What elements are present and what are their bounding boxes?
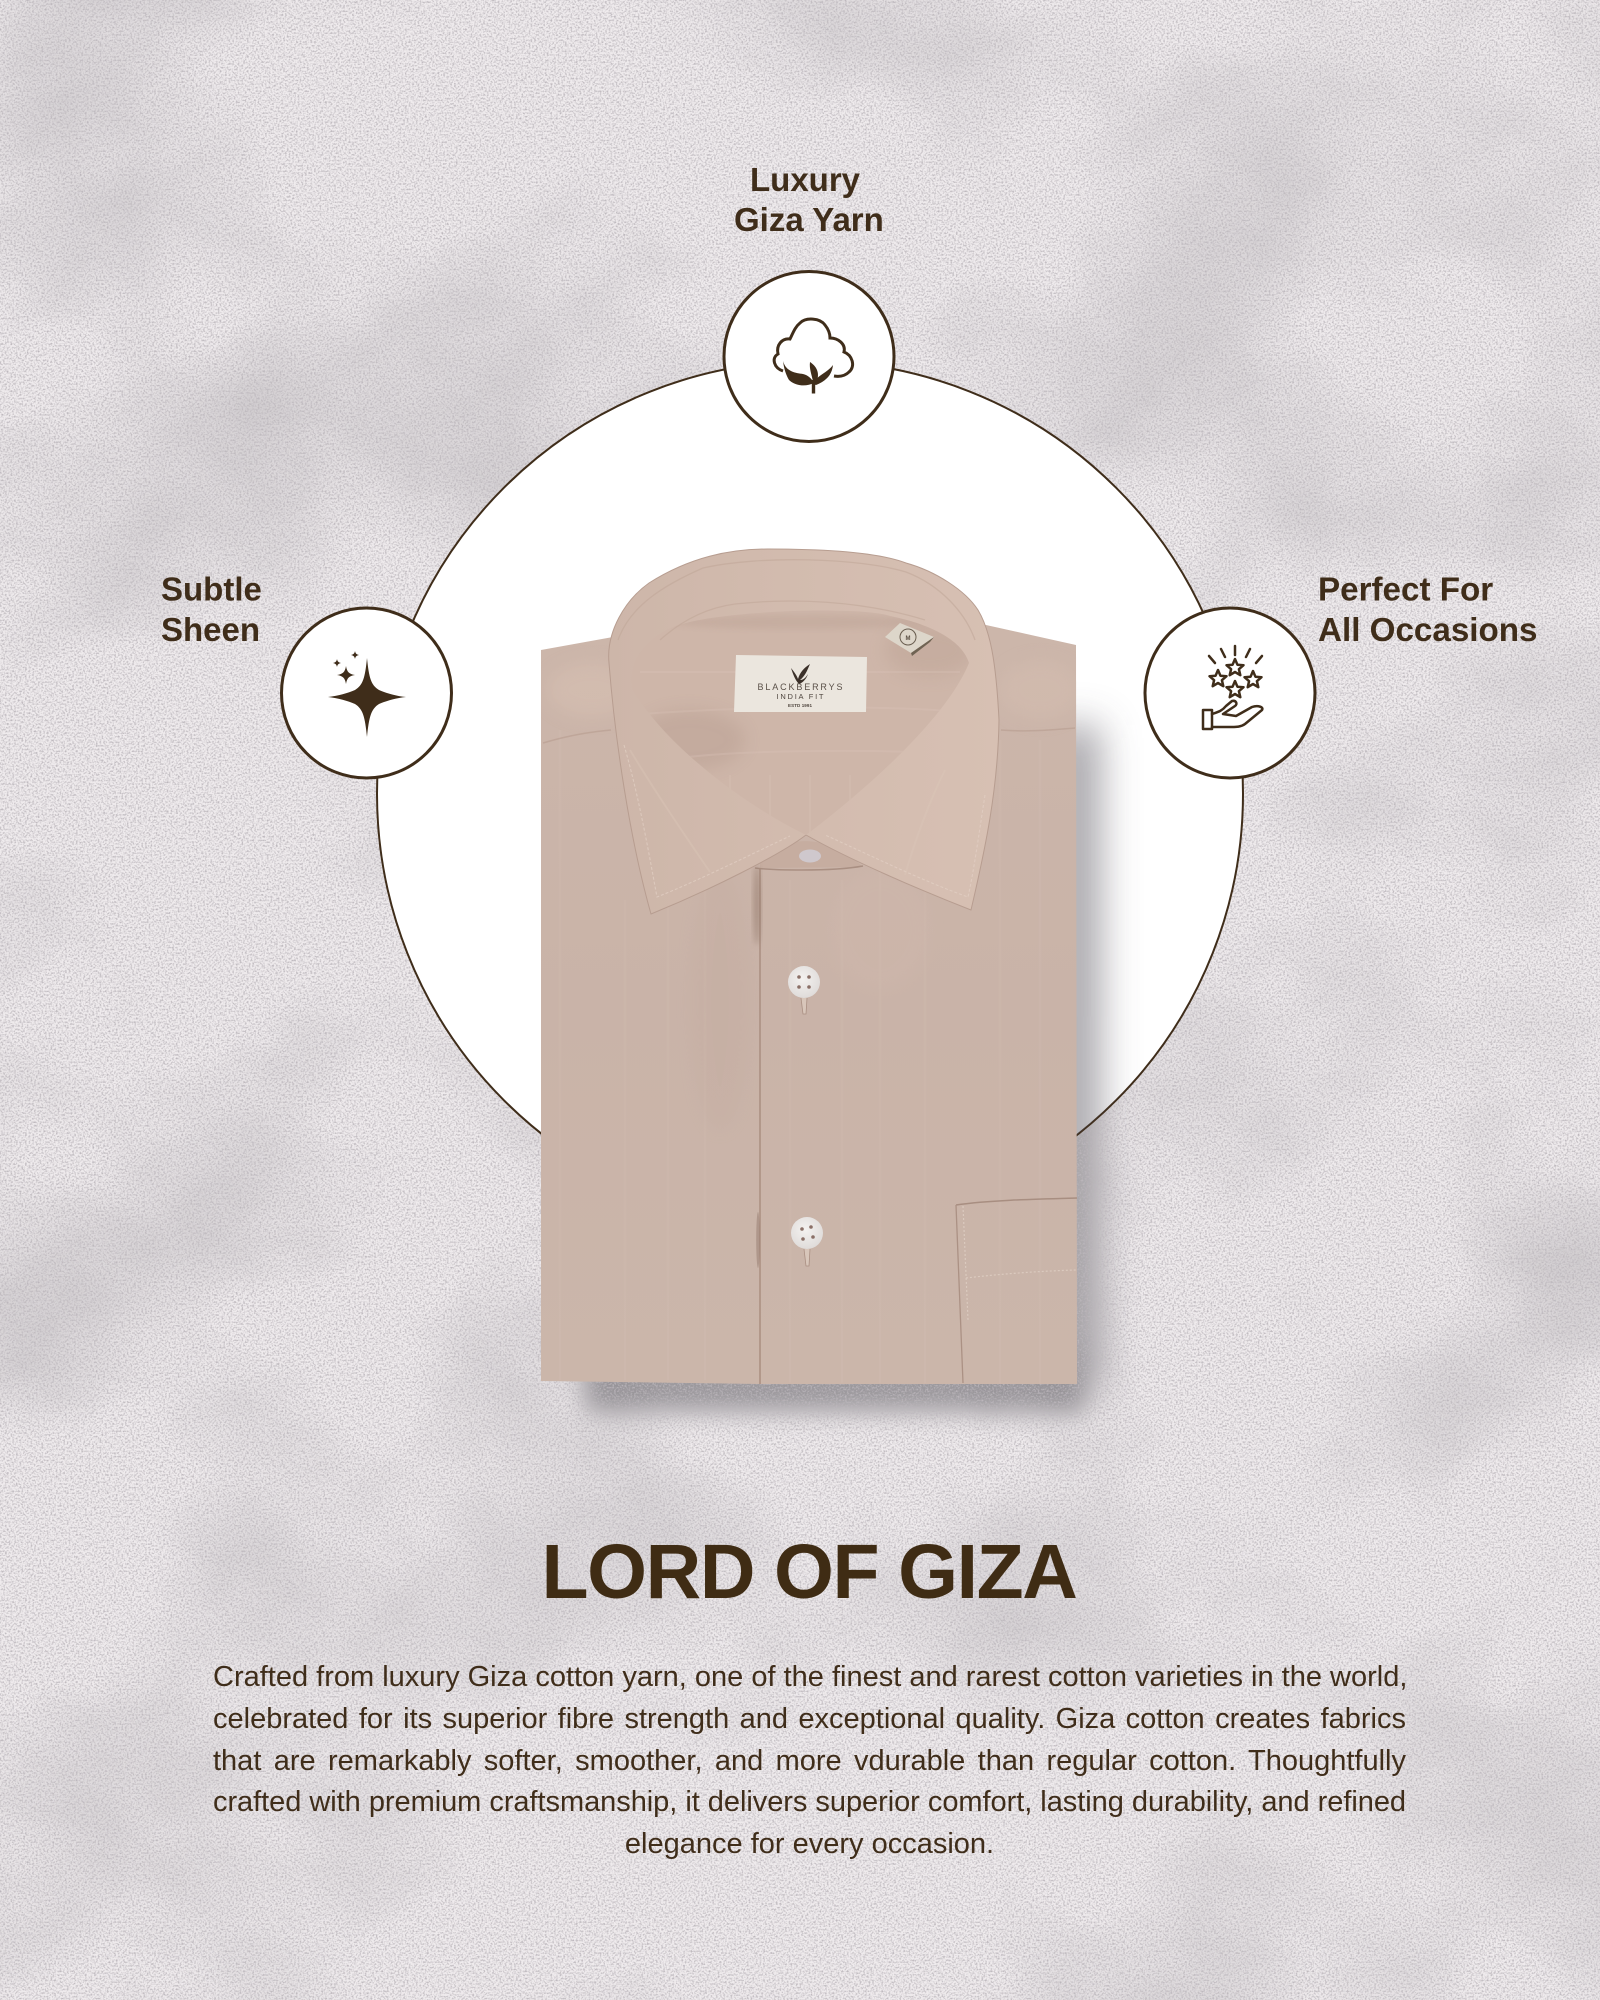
label: subtle sheen: Sheen (161, 611, 260, 648)
brand logo (791, 664, 810, 684)
shirt body (541, 625, 1077, 1384)
upper button (788, 966, 820, 1014)
fabric stripes (547, 660, 1080, 1384)
folded shirt (541, 549, 1080, 1384)
label: subtle sheen: Subtle (161, 570, 262, 608)
label: luxury giza yarn: Giza Yarn (734, 201, 884, 238)
description paragraph: elegance for every occasion. (625, 1828, 994, 1860)
label: subtle sheen (161, 570, 262, 648)
brand label: INDIA FIT (776, 692, 824, 701)
main title: LORD OF GIZA (542, 1529, 1076, 1615)
sleeve fold seams (543, 728, 1075, 743)
label: perfect for all occasions (1318, 572, 1538, 649)
size tag (885, 623, 934, 656)
neck shading (656, 619, 964, 766)
icon badge: hand with stars (1145, 608, 1315, 778)
description paragraph: that are remarkably softer, smoother, and more vdurable than regular cotton. Thoughtfully (213, 1745, 1406, 1777)
label: luxury giza yarn: Luxury (750, 161, 861, 198)
size tag: M (906, 636, 910, 642)
callout: subtle sheen (161, 570, 452, 778)
collar stitching (618, 560, 975, 640)
callout: perfect for all occasions (1145, 572, 1538, 778)
lower button (791, 1217, 823, 1266)
shirt shadow on white circle (1076, 701, 1126, 1135)
description paragraph: crafted with premium craftsmanship, it delivers superior comfort, lasting durability, and refined (213, 1786, 1406, 1818)
description paragraph: celebrated for its superior fibre strength and exceptional quality. Giza cotton creates fabrics (213, 1703, 1406, 1735)
brand label: ESTD 1991 (788, 703, 812, 708)
brand label (734, 655, 867, 712)
description paragraph (213, 1661, 1407, 1860)
neck opening (632, 611, 969, 835)
label: luxury giza yarn (734, 161, 884, 238)
label: perfect for all occasions: All Occasions (1318, 612, 1538, 649)
label: perfect for all occasions: Perfect For (1318, 572, 1493, 608)
collar (609, 549, 999, 914)
large white circle behind shirt (376, 368, 1244, 1136)
brand label: BLACKBERRYS (758, 682, 842, 692)
icon badge: cotton boll (724, 272, 894, 442)
pocket (956, 1198, 1077, 1383)
callout: luxury giza yarn (724, 161, 894, 442)
shirt shadow on background (585, 725, 1100, 1412)
collar stand and top button (755, 841, 863, 870)
placket (754, 865, 760, 1384)
icon badge: sparkle (282, 608, 452, 778)
description paragraph: Crafted from luxury Giza cotton yarn, one of the finest and rarest cotton varieties in the world, (213, 1661, 1407, 1693)
